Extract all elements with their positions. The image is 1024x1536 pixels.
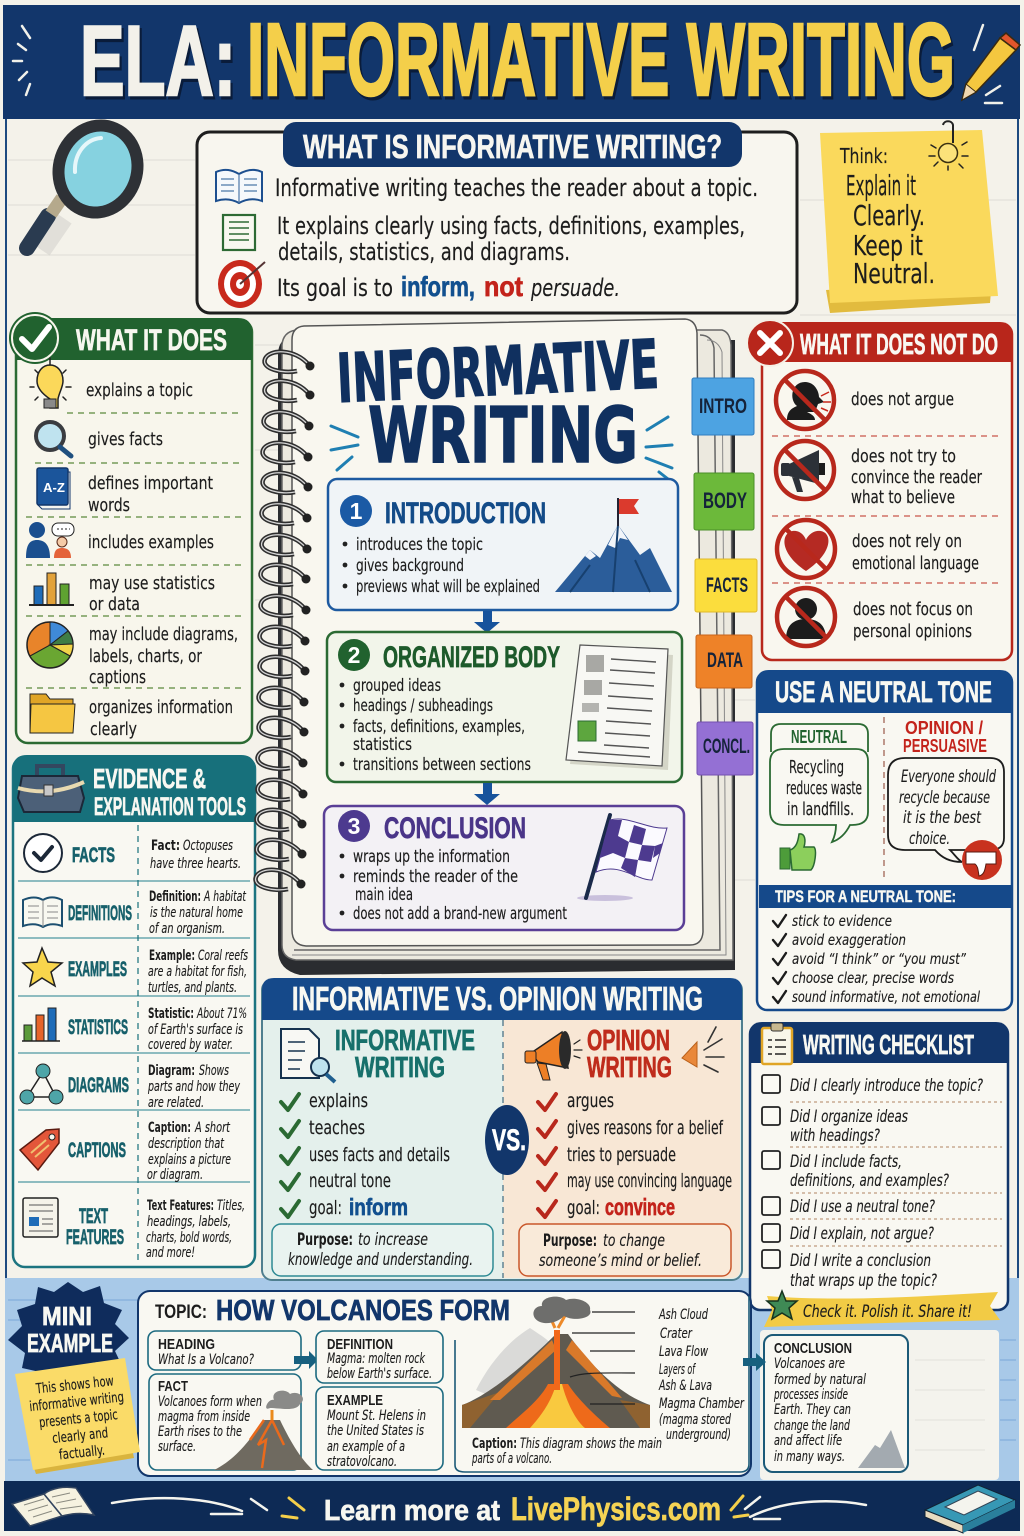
step: organized body: ORGANIZED BODY [383,641,560,674]
row descriptions: Caption: [148,1120,191,1136]
neutral example: in landfills. [787,799,854,820]
row descriptions: Fact: [151,838,180,854]
list text: does not try to [851,446,956,467]
informative list: uses facts and details [309,1144,450,1166]
opinion list: convince [605,1194,675,1220]
informative list: explains [309,1090,368,1112]
row labels: DIAGRAMS [68,1074,129,1097]
fact card: Earth rises to the [158,1424,242,1440]
tab: body [694,473,754,530]
heading [762,322,1012,362]
diagram labels: Ash Cloud [658,1307,708,1323]
sticky note: Keep it [853,229,923,262]
step: conclusion: main idea [355,885,413,905]
opinion example: OPINION / [905,718,983,738]
informative list: goal: [309,1197,342,1219]
row descriptions: explains a picture [148,1152,231,1168]
fact card: Volcanoes form when [158,1394,262,1410]
informative purpose [272,1224,493,1276]
panel: evidence and explanation tools [13,755,255,1267]
footer link text: LivePhysics.com [511,1491,721,1527]
step: introduction: previews what will be explained [356,577,540,597]
row descriptions: Titles, [217,1198,245,1214]
list text: defines important [88,473,213,494]
opinion example: choice. [909,829,950,849]
topic heading: HOW VOLCANOES FORM [216,1295,510,1327]
text block: inform, [401,271,475,302]
icon: no opinions [777,588,835,646]
row labels: TEXT [79,1205,108,1228]
conclusion card: change the land [774,1418,850,1434]
step: organized body: facts, definitions, examples, [353,717,525,737]
row labels: STATISTICS [68,1016,128,1039]
example card: stratovolcano. [327,1454,397,1470]
opinion example: PERSUASIVE [903,736,987,756]
checkboxes [762,1075,780,1268]
icon: document [223,215,255,250]
neutral example: Recycling [789,757,844,778]
step: conclusion: CONCLUSION [384,812,526,845]
row descriptions: Octopuses [183,838,233,854]
text block [275,174,758,302]
notebook page [292,319,703,946]
opinion heading [587,1025,672,1084]
opinion heading: WRITING [587,1052,672,1084]
informative heading [335,1025,475,1084]
heading card [148,1331,301,1370]
row descriptions: is the natural home [150,905,243,921]
tab: body: BODY [703,488,747,513]
heading [757,670,1012,713]
footer link text [324,1491,721,1527]
tab: facts [695,559,757,612]
tab: conclusion: CONCL. [703,735,750,758]
step: organized body: headings / subheadings [353,696,493,716]
checklist questions: Did I use a neutral tone? [790,1197,935,1217]
list text: gives facts [88,429,163,450]
icon: orange megaphone [525,1031,582,1080]
opinion list: goal: [567,1197,600,1219]
arrow: body to conclusion [474,783,500,805]
checklist questions [790,1076,983,1291]
starburst badge: mini example: EXAMPLE [27,1328,113,1358]
opinion purpose: to change [603,1231,665,1251]
tips list: avoid exaggeration [792,931,906,949]
text block: persuade. [530,274,620,302]
diagram labels: underground) [666,1427,731,1443]
step: conclusion: reminds the reader of the [353,867,518,887]
panel: what it does not do [747,320,1012,660]
icon: small volcano [214,1391,313,1470]
heading pill: WHAT IS INFORMATIVE WRITING? [303,128,722,165]
example card [316,1387,443,1470]
step: introduction: gives background [356,556,464,576]
definition card [316,1331,443,1383]
informative heading: INFORMATIVE [335,1025,475,1057]
informative list: teaches [309,1117,365,1139]
tab: facts: FACTS [706,574,748,597]
step: organized body: statistics [353,735,412,755]
icon: people talking [26,522,74,558]
sticky note: mini example: presents a topic [38,1407,119,1431]
row descriptions: Definition: [149,889,201,905]
step: conclusion: 3 [348,813,360,839]
diagram labels: (magma stored [659,1412,731,1428]
heading card: What Is a Volcano? [158,1352,254,1368]
tips heading: TIPS FOR A NEUTRAL TONE: [775,887,956,906]
volcano diagram [455,1296,749,1472]
row descriptions: headings, labels, [147,1214,231,1230]
diagram labels: Ash & Lava [658,1378,712,1394]
diagram labels: Layers of [659,1362,696,1378]
icon: folder [30,694,75,733]
icon: pencil [962,33,1020,100]
text block: details, statistics, and diagrams. [278,238,570,266]
text block: Its goal is to [277,274,393,302]
text block: It explains clearly using facts, definitions, examples, [277,212,745,240]
icon: document and magnifier [281,1029,335,1082]
row descriptions: Diagram: [148,1063,195,1079]
panel: conclusion paper [760,1330,999,1480]
row labels [66,844,132,1249]
heading [13,755,255,822]
diagram labels: Crater [660,1326,693,1342]
sticky note: Explain it [846,169,916,202]
list text: or data [89,594,140,615]
conclusion card: Volcanoes are [774,1356,845,1372]
step: organized body: 2 [348,642,360,668]
notebook title: WRITING [368,392,638,481]
icon: dictionary [37,468,70,509]
list text: includes examples [88,532,214,553]
opinion list [538,1090,732,1220]
opinion example [888,718,1004,880]
opinion purpose [519,1224,731,1276]
definition card: Magma: molten rock [327,1351,426,1367]
neutral example: reduces waste [786,778,862,799]
row descriptions: covered by water. [148,1037,233,1053]
checklist questions: with headings? [790,1126,880,1146]
icon: network diagram [20,1064,63,1104]
starburst badge: mini example: MINI [42,1301,92,1331]
topic heading: TOPIC: [155,1302,207,1323]
row descriptions: Example: [149,948,195,964]
informative list [281,1090,450,1220]
panel: what it does [9,312,252,743]
diagram labels: Magma Chamber [659,1396,745,1412]
row descriptions: A short [194,1120,230,1136]
fact card: magma from inside [158,1409,250,1425]
banner: check it [764,1291,1000,1327]
conclusion card: Earth. They can [774,1402,851,1418]
icon: gray mountain [858,1430,905,1468]
example card: an example of a [327,1439,405,1455]
diagram caption [471,1436,662,1467]
icon: open book [216,170,262,203]
definition card: DEFINITION [327,1336,393,1353]
definition card: below Earth's surface. [327,1366,432,1382]
tab: conclusion [697,722,753,775]
list text: does not focus on [853,599,973,620]
opinion purpose: Purpose: [543,1231,597,1251]
vs badge [485,1105,529,1175]
tips list [773,912,981,1006]
list text: clearly [90,719,137,740]
icon: star [23,948,62,986]
heading: INFORMATIVE VS. OPINION WRITING [292,980,703,1017]
opinion heading: OPINION [587,1025,670,1057]
diagram caption: parts of a volcano. [471,1451,552,1467]
checklist questions: that wraps up the topic? [790,1271,937,1291]
step: organized body: transitions between sections [353,755,531,775]
row descriptions: are a habitat for fish, [148,964,247,980]
heading [262,978,742,1020]
heading: WHAT IT DOES [76,324,227,357]
icon: book [23,897,62,927]
fact card: FACT [158,1378,188,1395]
step: introduction: introduces the topic [356,535,483,555]
example card: the United States is [327,1423,424,1439]
tips list: stick to evidence [792,912,892,930]
diagram caption: Caption: [472,1436,517,1452]
conclusion card: and affect life [774,1433,842,1449]
list text: labels, charts, or [89,646,202,667]
informative list: neutral tone [309,1170,391,1192]
heading [750,1022,1008,1063]
checklist questions: Did I write a conclusion [790,1251,931,1271]
informative list: inform [349,1194,408,1220]
icon: outline document [566,645,673,770]
neutral example: NEUTRAL [791,727,847,747]
icon: mountain with flag [555,498,672,592]
panel: evidence and explanation tools: DEFINITIONS [68,902,132,925]
icon: dictionary: A-Z [43,480,65,495]
icon: magnifier [36,422,71,456]
icon: lightbulb [30,358,71,408]
sticky note [820,121,998,313]
opinion purpose: someone’s mind or belief. [539,1251,702,1271]
step: introduction: 1 [350,498,363,524]
sticky note: Clearly. [853,199,925,232]
conclusion card: in many ways. [774,1449,845,1465]
row descriptions: of Earth's surface is [148,1022,243,1038]
row descriptions: of an organism. [149,921,225,937]
opinion list: gives reasons for a belief [567,1117,724,1139]
icon: check badge [9,312,61,364]
icon: light bulb and clip [929,121,968,170]
heading [16,318,252,360]
row descriptions: Statistic: [148,1006,194,1022]
row descriptions [146,838,248,1261]
list text: organizes information [89,697,233,718]
list text: captions [89,667,146,688]
icon: open book [12,1487,94,1526]
icon: text feature page [23,1198,58,1237]
icon: checkered flag [577,815,667,901]
footer link text: Learn more at [324,1495,500,1527]
step: introduction: INTRODUCTION [385,497,546,530]
row descriptions: are related. [148,1095,204,1111]
sticky note: mini example: factually. [58,1443,106,1463]
row descriptions: turtles, and plants. [148,980,237,996]
neutral example [770,724,868,870]
opinion list: argues [567,1090,614,1112]
row descriptions: Coral reefs [198,948,248,964]
diagram labels [658,1307,745,1443]
notebook title: INFORMATIVE [335,325,660,418]
icon: bar chart [29,573,74,605]
list text [851,389,982,642]
panel: what is informative writing [197,122,797,313]
list text: may use statistics [89,573,215,594]
list text: does not argue [851,389,954,410]
sticky note: mini example [15,1358,140,1474]
icon: blue book [925,1485,1015,1533]
tips list: choose clear, precise words [792,969,954,987]
text block: Informative writing teaches the reader about a topic. [275,174,758,202]
checklist questions: Did I organize ideas [790,1107,908,1127]
text block: not [484,271,523,302]
title: ELA: [82,8,238,119]
conclusion card: formed by natural [774,1372,866,1388]
example card: Mount St. Helens in [327,1408,426,1424]
step: conclusion: wraps up the information [353,847,510,867]
panel: informative vs opinion writing [262,978,742,1280]
fact card: surface. [158,1439,196,1455]
icon: target [218,260,265,308]
list text: may include diagrams, [89,624,238,645]
heading: EVIDENCE & [93,763,206,794]
conclusion card: processes inside [773,1387,848,1403]
row descriptions: have three hearts. [150,856,241,872]
sticky note: Think: [839,144,888,168]
icon: toolbox [18,766,84,812]
row descriptions: About 71% [196,1006,247,1022]
row descriptions: A habitat [203,889,246,905]
opinion list: tries to persuade [567,1144,676,1166]
fact card [149,1374,313,1470]
diagram caption: This diagram shows the main [520,1436,662,1452]
arrow: heading to definition [294,1351,318,1369]
informative heading: WRITING [355,1052,445,1084]
row descriptions: description that [148,1136,224,1152]
row descriptions: and more! [146,1245,195,1261]
sticky note: mini example: This shows how [35,1373,114,1397]
notebook back pages [278,330,735,975]
row descriptions: Text Features: [147,1198,214,1214]
list text [86,380,238,740]
checklist questions: definitions, and examples? [790,1171,949,1191]
tips list: avoid “I think” or “you must” [792,950,966,968]
icon: bars [22,1008,60,1041]
icon: no emotion [777,520,835,578]
icon: green star [767,1291,797,1319]
tab: data: DATA [707,649,743,672]
icon: thumbs up [780,834,815,870]
step: organized body [327,632,682,782]
tab: intro: INTRO [699,395,747,418]
row descriptions: Shows [199,1063,229,1079]
row labels: FEATURES [66,1226,124,1249]
list text: explains a topic [86,380,193,401]
title: ELA: [80,5,236,116]
icon: tag [20,1129,59,1170]
tab: data [696,635,752,688]
list text: personal opinions [853,621,972,642]
icon: no megaphone [776,441,834,499]
list text: words [88,495,130,516]
sticky note: Neutral. [853,257,935,290]
icon: no arguing [776,371,834,429]
checklist questions: Did I include facts, [790,1152,902,1172]
heading pill [283,122,742,167]
list text: does not rely on [852,531,962,552]
heading card: HEADING [158,1336,215,1353]
step: introduction [328,479,678,610]
conclusion card [764,1335,908,1472]
panel: mini example [138,1291,751,1476]
icon: thumbs down [962,840,1002,880]
diagram labels: Lava Flow [659,1344,708,1360]
row descriptions: charts, bold words, [146,1230,232,1246]
header banner [3,2,1020,120]
step: conclusion: does not add a brand-new argument [353,904,567,924]
mini example band [5,1278,1019,1482]
starburst badge: mini example [8,1282,129,1372]
sticky note: mini example: informative writing [29,1389,125,1415]
informative purpose: to increase [358,1230,428,1250]
row labels: FACTS [72,844,115,867]
row descriptions: parts and how they [147,1079,240,1095]
step: organized body: grouped ideas [353,676,441,696]
icon: check circle [24,834,62,872]
tab: intro [692,378,754,435]
informative purpose: Purpose: [297,1230,353,1250]
notebook title [335,325,660,481]
conclusion card: CONCLUSION [774,1340,852,1357]
footer banner [4,1481,1020,1533]
opinion list: may use convincing language [567,1170,732,1192]
example card: EXAMPLE [327,1392,383,1409]
arrow: volcano to conclusion [743,1353,766,1371]
step: conclusion [324,806,684,930]
informative purpose: knowledge and understanding. [288,1250,473,1270]
row descriptions: or diagram. [147,1167,203,1183]
checklist questions: Did I explain, not argue? [790,1224,934,1244]
arrow: intro to body [474,611,500,633]
icon: pie chart [27,622,73,668]
notebook [256,319,757,975]
list text: what to believe [851,487,955,508]
row labels: CAPTIONS [68,1139,126,1162]
spiral binding [256,352,314,890]
icon: magnifying glass [27,108,156,251]
panel: use a neutral tone [757,670,1012,1010]
heading: EXPLANATION TOOLS [94,793,246,821]
opinion example: it is the best [903,808,982,828]
vs badge: VS. [492,1124,526,1157]
icon: x badge [747,320,793,366]
sticky note: mini example: clearly and [52,1425,109,1447]
icon: clipboard [762,1023,792,1064]
row labels: EXAMPLES [68,958,127,981]
panel: writing checklist [750,1022,1008,1310]
